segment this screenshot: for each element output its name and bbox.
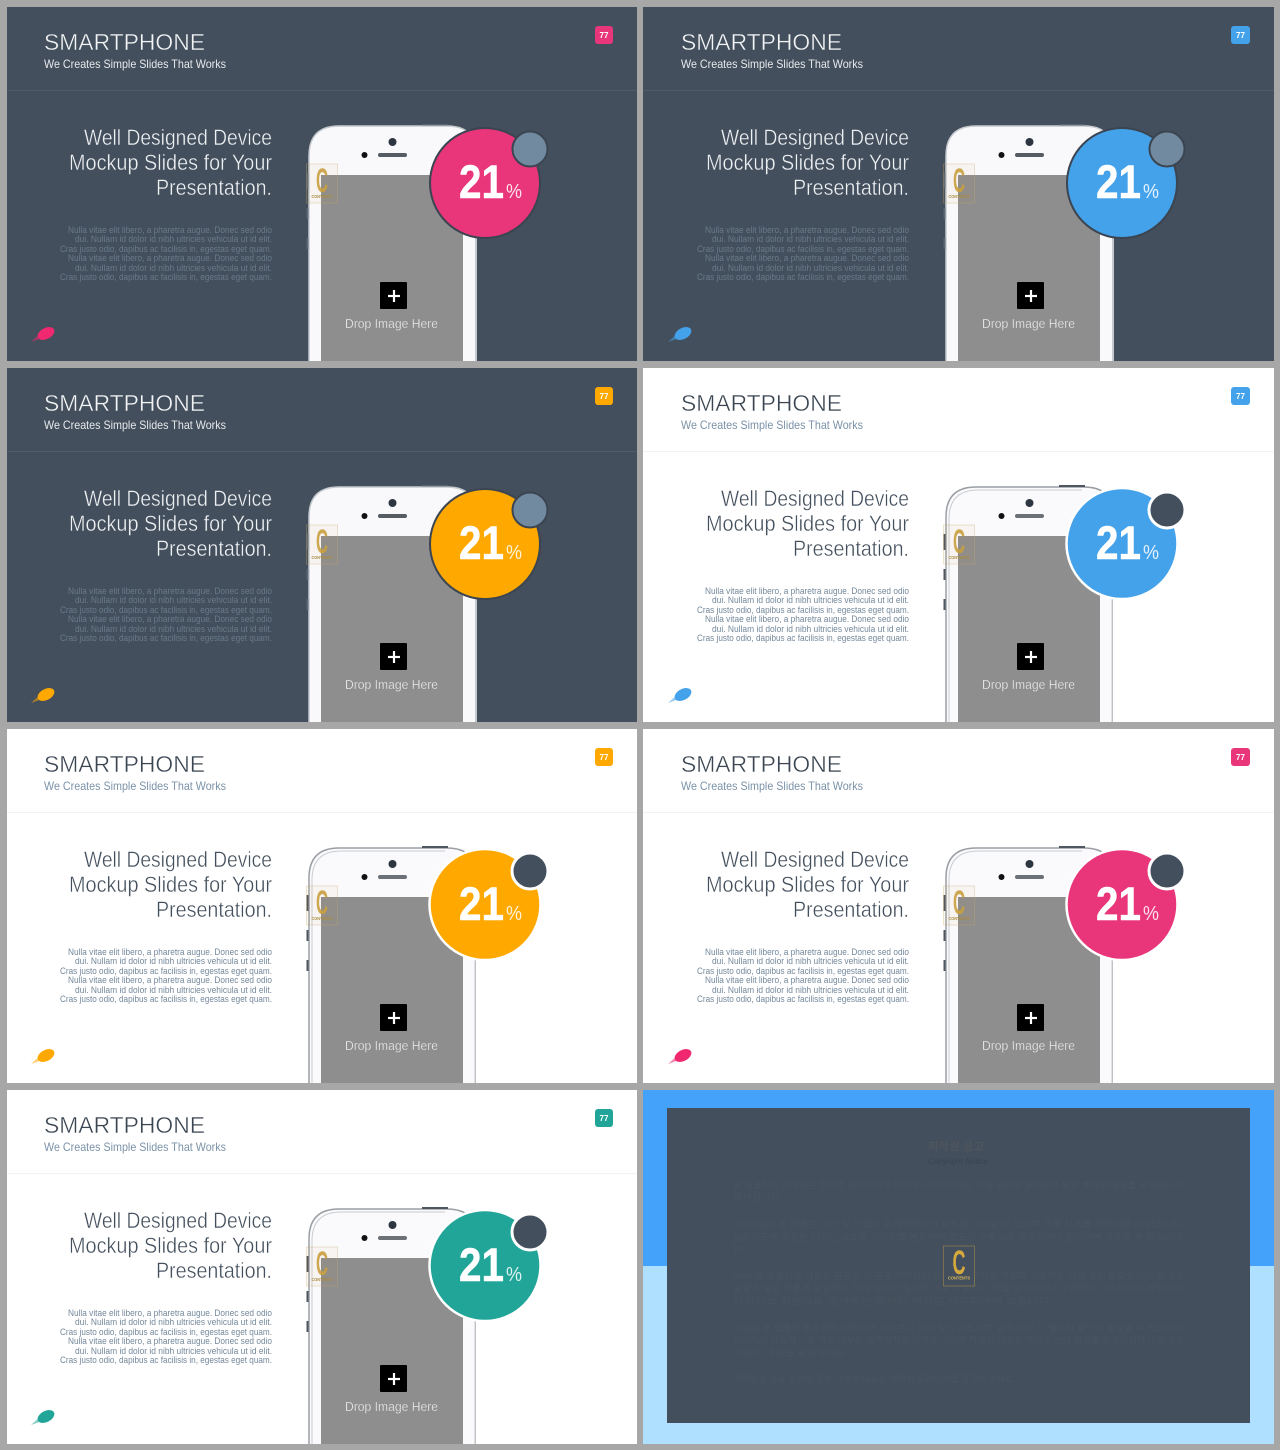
watermark logo: C xyxy=(316,523,328,561)
heading xyxy=(706,486,909,561)
slide 5: white orange xyxy=(7,729,637,1083)
body text: dui. Nullam id dolor id nibh ultricies vehicula ut id elit. xyxy=(712,234,909,244)
body text: Cras justo odio, dapibus ac facilisis in, egestas eget quam. xyxy=(60,1355,272,1365)
percent circle: 21 xyxy=(459,516,504,569)
body text xyxy=(60,586,272,643)
body text: Nulla vitae elit libero, a pharetra augue. Donec sed odio xyxy=(705,253,909,263)
body text: Cras justo odio, dapibus ac facilisis in, egestas eget quam. xyxy=(60,605,272,615)
page badge xyxy=(1231,748,1250,766)
body text xyxy=(60,1308,272,1365)
watermark logo: CONTENTS xyxy=(948,916,970,921)
page badge: 77 xyxy=(1236,392,1245,401)
watermark logo xyxy=(306,523,338,564)
slide 3: dark orange xyxy=(7,368,637,722)
body text: dui. Nullam id dolor id nibh ultricies vehicula ut id elit. xyxy=(712,956,909,966)
icon: rocket xyxy=(668,1046,694,1065)
subtitle: We Creates Simple Slides That Works xyxy=(681,779,863,793)
page badge xyxy=(1231,387,1250,405)
body text: Nulla vitae elit libero, a pharetra augue. Donec sed odio xyxy=(705,614,909,624)
slide 4: white blue xyxy=(643,368,1274,722)
body text: Cras justo odio, dapibus ac facilisis in, egestas eget quam. xyxy=(697,966,909,976)
heading: Presentation. xyxy=(793,175,909,200)
page badge xyxy=(1231,26,1250,44)
body text: Nulla vitae elit libero, a pharetra augue. Donec sed odio xyxy=(705,975,909,985)
copyright paragraphs: 저작권과 사용 범위에 관한 자세한 내용은 제작사 홈페이지를 참고해 주세요. xyxy=(733,1374,1016,1384)
body text: dui. Nullam id dolor id nibh ultricies vehicula ut id elit. xyxy=(75,985,272,995)
percent circle: 21 xyxy=(1096,155,1141,208)
percent circle xyxy=(430,489,540,599)
heading xyxy=(706,125,909,200)
body text: dui. Nullam id dolor id nibh ultricies vehicula ut id elit. xyxy=(75,595,272,605)
small circle xyxy=(1149,853,1185,889)
drop image placeholder xyxy=(982,1004,1075,1053)
percent circle: 21 xyxy=(459,155,504,208)
heading: Well Designed Device xyxy=(84,125,272,150)
body text: Nulla vitae elit libero, a pharetra augue. Donec sed odio xyxy=(68,586,272,596)
copyright paragraphs: 이미지의 상업적 이용 가능 여부는 원저작자의 정책을 따르며 자세한 내용은 제작사 안내 문서를 참고하시기 바랍니다. xyxy=(733,1335,1185,1345)
drop image placeholder xyxy=(982,282,1075,331)
body text: Cras justo odio, dapibus ac facilisis in, egestas eget quam. xyxy=(697,605,909,615)
copyright paragraphs: 자세한 내용을 확인하세요. xyxy=(733,1348,848,1358)
heading: Presentation. xyxy=(793,536,909,561)
body text: Cras justo odio, dapibus ac facilisis in, egestas eget quam. xyxy=(697,994,909,1004)
heading xyxy=(69,486,272,561)
drop image placeholder xyxy=(345,1004,438,1053)
body text: Nulla vitae elit libero, a pharetra augue. Donec sed odio xyxy=(68,1308,272,1318)
drop image placeholder xyxy=(345,1365,438,1414)
drop image placeholder: Drop Image Here xyxy=(982,1038,1075,1053)
watermark logo: CONTENTS xyxy=(312,916,333,921)
percent circle xyxy=(1066,488,1178,599)
logo xyxy=(944,1244,974,1286)
page badge: 77 xyxy=(1236,31,1245,40)
small circle xyxy=(512,853,548,889)
body text: dui. Nullam id dolor id nibh ultricies vehicula ut id elit. xyxy=(75,263,272,273)
watermark logo xyxy=(306,162,338,203)
percent circle: % xyxy=(506,542,522,564)
copyright paragraphs: 슬라이드에 포함된 디자인 요소와 이미지를 분리하여 별도의 상품으로 제작하거나 온라인에 공유할 수 없습니다. xyxy=(733,1232,1185,1242)
drop image placeholder xyxy=(345,643,438,692)
body text: dui. Nullam id dolor id nibh ultricies vehicula ut id elit. xyxy=(712,595,909,605)
body text: Nulla vitae elit libero, a pharetra augue. Donec sed odio xyxy=(705,947,909,957)
watermark logo: C xyxy=(316,884,328,922)
title: SMARTPHONE xyxy=(44,1112,205,1138)
drop image placeholder xyxy=(345,282,438,331)
icon: rocket xyxy=(31,1046,57,1065)
heading: Mockup Slides for Your xyxy=(706,511,909,536)
watermark logo: C xyxy=(953,162,965,200)
phone mockup xyxy=(944,846,1114,1083)
subtitle: We Creates Simple Slides That Works xyxy=(44,779,226,793)
heading: Mockup Slides for Your xyxy=(69,1233,272,1258)
body text: dui. Nullam id dolor id nibh ultricies vehicula ut id elit. xyxy=(712,985,909,995)
icon: rocket xyxy=(31,685,57,704)
percent circle: 21 xyxy=(1096,516,1141,569)
body text: Cras justo odio, dapibus ac facilisis in, egestas eget quam. xyxy=(697,272,909,282)
body text: Cras justo odio, dapibus ac facilisis in, egestas eget quam. xyxy=(60,1327,272,1337)
subtitle: We Creates Simple Slides That Works xyxy=(44,418,226,432)
body text: dui. Nullam id dolor id nibh ultricies vehicula ut id elit. xyxy=(75,956,272,966)
heading: Well Designed Device xyxy=(84,1208,272,1233)
body text: dui. Nullam id dolor id nibh ultricies vehicula ut id elit. xyxy=(75,1317,272,1327)
logo: C xyxy=(952,1244,966,1282)
copyright paragraphs: 본 템플릿의 저작권은 콘텐츠 제작자에게 있으며 구매자에게는 사용 권한만 부여되며 무단 복제와 배포를 금지합니다. xyxy=(733,1180,1185,1190)
watermark logo: C xyxy=(953,884,965,922)
icon: rocket xyxy=(668,324,694,343)
small circle xyxy=(512,492,548,528)
heading: Well Designed Device xyxy=(721,847,909,872)
body text: Nulla vitae elit libero, a pharetra augue. Donec sed odio xyxy=(68,253,272,263)
heading: Mockup Slides for Your xyxy=(706,150,909,175)
percent circle: % xyxy=(506,1264,522,1286)
percent circle xyxy=(430,849,540,960)
slide 8: copyright notice xyxy=(643,1090,1274,1444)
watermark logo xyxy=(944,162,974,203)
copyright paragraphs: Font 본 템플릿에 사용된 글꼴은 각 글꼴 제작사의 라이선스 정책을 따르며 사용자는 해당 조건을 확인해야 합니다. xyxy=(733,1271,1185,1281)
small circle xyxy=(1150,132,1184,166)
percent circle: 21 xyxy=(459,1238,504,1291)
watermark logo: C xyxy=(953,523,965,561)
heading xyxy=(69,847,272,922)
watermark logo: CONTENTS xyxy=(948,555,970,560)
phone mockup xyxy=(944,124,1114,361)
body text: Cras justo odio, dapibus ac facilisis in, egestas eget quam. xyxy=(60,272,272,282)
watermark logo: CONTENTS xyxy=(948,194,970,199)
body text: dui. Nullam id dolor id nibh ultricies vehicula ut id elit. xyxy=(712,263,909,273)
page badge xyxy=(595,748,613,766)
watermark logo: CONTENTS xyxy=(312,1277,333,1282)
body text xyxy=(60,225,272,282)
slide 7: white teal xyxy=(7,1090,637,1444)
body text: Nulla vitae elit libero, a pharetra augue. Donec sed odio xyxy=(68,225,272,235)
percent circle xyxy=(430,1210,540,1321)
heading: Mockup Slides for Your xyxy=(706,872,909,897)
watermark logo xyxy=(306,884,338,925)
watermark logo: CONTENTS xyxy=(312,555,333,560)
title: SMARTPHONE xyxy=(681,390,842,416)
copyright panel xyxy=(667,1108,1250,1423)
small circle xyxy=(512,1214,548,1250)
heading: Well Designed Device xyxy=(84,847,272,872)
body text: dui. Nullam id dolor id nibh ultricies vehicula ut id elit. xyxy=(75,1346,272,1356)
percent circle: % xyxy=(1143,903,1159,925)
small circle xyxy=(512,132,548,166)
heading: Presentation. xyxy=(156,175,272,200)
drop image placeholder xyxy=(982,643,1075,692)
body text: Cras justo odio, dapibus ac facilisis in, egestas eget quam. xyxy=(60,244,272,254)
percent circle: % xyxy=(506,903,522,925)
icon: rocket xyxy=(31,1407,57,1426)
heading: Presentation. xyxy=(156,536,272,561)
copyright paragraphs: Copyright 본 제품은 개인 및 기업의 프레젠테이션 용도로 사용할 수 있으며 제품 자체를 재판매할 수 없습니다. xyxy=(733,1219,1185,1229)
heading: Well Designed Device xyxy=(721,125,909,150)
subtitle: We Creates Simple Slides That Works xyxy=(681,57,863,71)
copyright heading: 저작권 공고 xyxy=(928,1139,984,1153)
phone mockup xyxy=(944,485,1114,722)
page badge xyxy=(595,387,613,405)
body text: Cras justo odio, dapibus ac facilisis in, egestas eget quam. xyxy=(697,244,909,254)
percent circle: % xyxy=(1143,542,1159,564)
drop image placeholder: Drop Image Here xyxy=(345,1038,438,1053)
body text xyxy=(60,947,272,1004)
heading: Presentation. xyxy=(156,1258,272,1283)
percent circle: 21 xyxy=(459,877,504,930)
icon: rocket xyxy=(31,324,57,343)
body text: dui. Nullam id dolor id nibh ultricies vehicula ut id elit. xyxy=(75,624,272,634)
title: SMARTPHONE xyxy=(44,390,205,416)
percent circle xyxy=(1067,128,1177,238)
heading: Presentation. xyxy=(793,897,909,922)
watermark logo xyxy=(944,523,974,564)
title: SMARTPHONE xyxy=(681,751,842,777)
page badge: 77 xyxy=(600,31,609,40)
copyright paragraphs: 글꼴 파일은 제품에 포함되어 있지 않으며 필요한 경우 사용자가 직접 설치하거나 구매하여 사용하시기 바랍니다. xyxy=(733,1283,1185,1293)
percent circle: % xyxy=(1143,181,1159,203)
body text: dui. Nullam id dolor id nibh ultricies vehicula ut id elit. xyxy=(75,234,272,244)
title: SMARTPHONE xyxy=(44,751,205,777)
phone mockup xyxy=(306,846,477,1083)
small circle xyxy=(1149,492,1185,528)
heading: Well Designed Device xyxy=(721,486,909,511)
page badge xyxy=(595,1109,613,1127)
copyright paragraphs: 라이선스 위반으로 발생하는 문제의 책임은 사용자에게 있습니다. xyxy=(733,1296,1053,1306)
phone mockup xyxy=(306,485,477,722)
title: SMARTPHONE xyxy=(44,29,205,55)
drop image placeholder: Drop Image Here xyxy=(345,316,438,331)
copyright paragraphs: 감사합니다. xyxy=(733,1192,783,1202)
slide 6: white pink xyxy=(643,729,1274,1083)
watermark logo xyxy=(306,1245,338,1286)
phone mockup xyxy=(306,1207,477,1444)
body text: Cras justo odio, dapibus ac facilisis in, egestas eget quam. xyxy=(60,994,272,1004)
body text: Nulla vitae elit libero, a pharetra augue. Donec sed odio xyxy=(705,586,909,596)
drop image placeholder: Drop Image Here xyxy=(982,677,1075,692)
logo: CONTENTS xyxy=(948,1276,970,1280)
body text xyxy=(697,947,909,1004)
phone mockup xyxy=(306,124,477,361)
percent circle xyxy=(430,128,540,238)
heading: Mockup Slides for Your xyxy=(69,511,272,536)
body text: dui. Nullam id dolor id nibh ultricies vehicula ut id elit. xyxy=(712,624,909,634)
body text: Nulla vitae elit libero, a pharetra augue. Donec sed odio xyxy=(68,1336,272,1346)
heading: Presentation. xyxy=(156,897,272,922)
subtitle: We Creates Simple Slides That Works xyxy=(681,418,863,432)
watermark logo: CONTENTS xyxy=(312,194,333,199)
subtitle: We Creates Simple Slides That Works xyxy=(44,57,226,71)
drop image placeholder: Drop Image Here xyxy=(345,677,438,692)
slide 2: dark blue xyxy=(643,7,1274,361)
page badge: 77 xyxy=(600,753,609,762)
body text: Nulla vitae elit libero, a pharetra augue. Donec sed odio xyxy=(68,614,272,624)
body text: Cras justo odio, dapibus ac facilisis in, egestas eget quam. xyxy=(60,966,272,976)
subtitle: We Creates Simple Slides That Works xyxy=(44,1140,226,1154)
percent circle xyxy=(1066,849,1178,960)
body text xyxy=(697,225,909,282)
body text: Nulla vitae elit libero, a pharetra augue. Donec sed odio xyxy=(68,975,272,985)
body text: Cras justo odio, dapibus ac facilisis in, egestas eget quam. xyxy=(60,633,272,643)
heading: Mockup Slides for Your xyxy=(69,872,272,897)
page badge: 77 xyxy=(600,392,609,401)
copyright subheading: Copyright Notice xyxy=(928,1157,989,1166)
copyright paragraphs: Image 본 템플릿에 포함된 이미지와 아이콘은 미리 보기 용도이며 실제 사용 시 별도의 확인이 필요할 수 있습니다. xyxy=(733,1323,1185,1333)
page badge xyxy=(595,26,613,44)
drop image placeholder: Drop Image Here xyxy=(345,1399,438,1414)
drop image placeholder: Drop Image Here xyxy=(982,316,1075,331)
slide 1: dark pink xyxy=(7,7,637,361)
page badge: 77 xyxy=(600,1114,609,1123)
watermark logo: C xyxy=(316,1245,328,1283)
heading xyxy=(706,847,909,922)
body text: Nulla vitae elit libero, a pharetra augue. Donec sed odio xyxy=(705,225,909,235)
page badge: 77 xyxy=(1236,753,1245,762)
body text: Nulla vitae elit libero, a pharetra augue. Donec sed odio xyxy=(68,947,272,957)
body text xyxy=(697,586,909,643)
title: SMARTPHONE xyxy=(681,29,842,55)
watermark logo: C xyxy=(316,162,328,200)
heading xyxy=(69,125,272,200)
icon: rocket xyxy=(668,685,694,704)
percent circle: 21 xyxy=(1096,877,1141,930)
heading: Well Designed Device xyxy=(84,486,272,511)
percent circle: % xyxy=(506,181,522,203)
watermark logo xyxy=(944,884,974,925)
heading: Mockup Slides for Your xyxy=(69,150,272,175)
copyright paragraphs xyxy=(733,1180,1185,1384)
heading xyxy=(69,1208,272,1283)
body text: Cras justo odio, dapibus ac facilisis in, egestas eget quam. xyxy=(697,633,909,643)
copyright paragraphs: 합니다. xyxy=(733,1245,753,1255)
